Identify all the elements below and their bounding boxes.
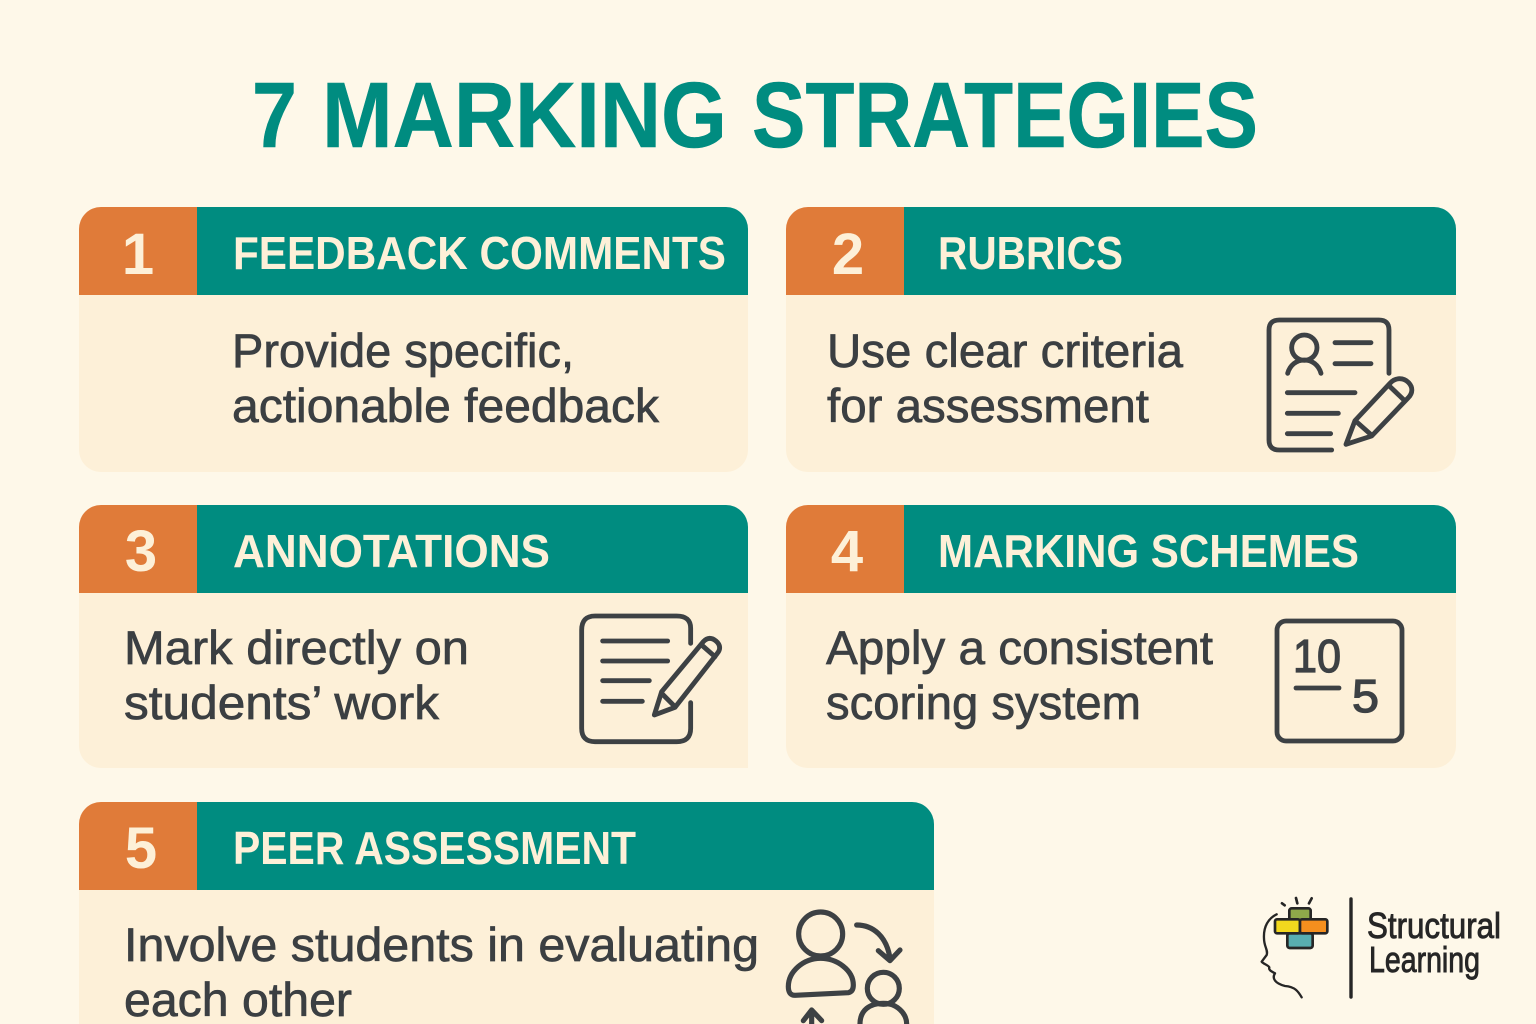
- title: [252, 63, 1258, 167]
- text: feedback description: actionable feedback: [232, 379, 660, 432]
- logo wordmark: [1367, 905, 1501, 980]
- icon: score box: 5: [1352, 670, 1379, 722]
- text: marking schemes description: Apply a consistent: [826, 621, 1213, 674]
- panel: rubrics: [786, 207, 1456, 472]
- text: annotations description: Mark directly on: [124, 621, 469, 674]
- icon: score box: 10: [1293, 630, 1341, 682]
- panel: feedback comments: [79, 207, 748, 472]
- panel: marking schemes: [786, 505, 1456, 768]
- text: marking schemes description: [826, 621, 1213, 729]
- number 1: 1: [122, 222, 154, 287]
- panel: annotations: [79, 505, 748, 768]
- number 3: 3: [125, 519, 157, 584]
- text: feedback description: Provide specific,: [232, 324, 574, 377]
- panel: peer assessment: [79, 802, 934, 1024]
- icon: head with coloured blocks: [1262, 898, 1327, 997]
- icon: score box: [1277, 621, 1402, 741]
- text: feedback description: [232, 324, 660, 432]
- text: peer assessment description: Involve students in evaluating: [124, 918, 759, 971]
- heading: marking schemes: MARKING SCHEMES: [938, 525, 1359, 577]
- heading: annotations: ANNOTATIONS: [233, 525, 550, 577]
- number 5: 5: [125, 816, 157, 881]
- text: annotations description: [124, 621, 469, 729]
- text: annotations description: students’ work: [124, 676, 440, 729]
- text: peer assessment description: [124, 918, 759, 1024]
- icon: document with pencil: [582, 616, 720, 742]
- text: rubrics description: for assessment: [827, 379, 1149, 432]
- title: MARKING: [322, 63, 727, 167]
- logo wordmark: Structural: [1367, 905, 1501, 946]
- heading: rubrics: RUBRICS: [938, 227, 1123, 279]
- icon: rubric sheet with pencil: [1269, 320, 1412, 450]
- title: STRATEGIES: [752, 63, 1258, 167]
- title: 7: [252, 63, 297, 167]
- icon: two students exchanging feedback: [788, 912, 907, 1024]
- number 2: 2: [832, 222, 864, 287]
- text: rubrics description: Use clear criteria: [827, 324, 1184, 377]
- logo wordmark: Learning: [1369, 939, 1480, 980]
- heading: peer assessment: PEER ASSESSMENT: [233, 822, 636, 874]
- text: rubrics description: [827, 324, 1184, 432]
- number 4: 4: [831, 519, 863, 584]
- logo: Structural Learning: [1262, 898, 1501, 997]
- text: marking schemes description: scoring system: [826, 676, 1141, 729]
- heading: feedback comments: FEEDBACK COMMENTS: [233, 227, 726, 279]
